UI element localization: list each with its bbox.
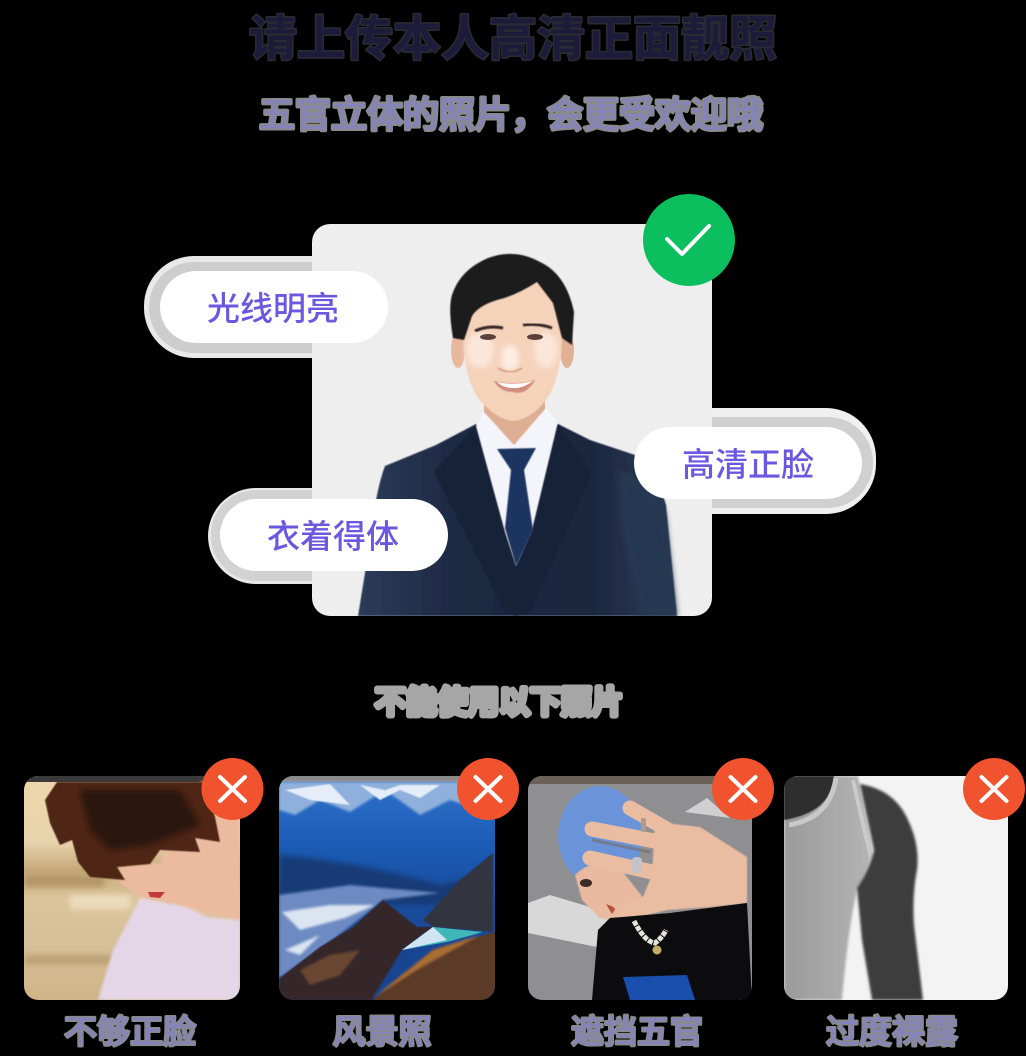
pill backing halos [144, 256, 876, 584]
hand [613, 822, 747, 920]
portrait: man in suit [358, 254, 677, 616]
subtitle: 五官立体的照片，会更受欢迎哦 [259, 94, 763, 135]
label: 不够正脸 [64, 1013, 196, 1050]
thumbnail: not front face [24, 758, 264, 1050]
ears [451, 336, 464, 368]
title: 请上传本人高清正面靓照 [249, 13, 777, 66]
chest [784, 776, 834, 820]
face [574, 866, 643, 920]
face [463, 280, 562, 421]
necklace [634, 921, 666, 943]
neck [484, 400, 546, 445]
pill: decent clothing [220, 499, 448, 571]
thumbnail: blocked face [528, 758, 774, 1050]
pill: clear front face [634, 427, 862, 499]
hair [450, 254, 574, 345]
pill: bright light: 光线明亮 [207, 290, 339, 327]
thumbnail: landscape [279, 758, 519, 1050]
arm [857, 784, 923, 1000]
thumbnail: revealing clothing [784, 758, 1025, 1050]
rings [632, 857, 642, 873]
panel: good example [144, 194, 876, 616]
icon: red cross [712, 758, 774, 820]
pill: bright light [160, 271, 388, 343]
photo card background [312, 224, 712, 616]
label: 遮挡五官 [571, 1013, 703, 1050]
icon: red cross [963, 758, 1025, 820]
beanie [558, 786, 642, 886]
label: 过度裸露 [826, 1013, 958, 1050]
hoodie [592, 903, 752, 1000]
pill: clear front face: 高清正脸 [682, 446, 814, 483]
jacket [358, 424, 677, 616]
brows, eyes, mouth [475, 324, 552, 331]
pill: decent clothing: 衣着得体 [267, 518, 399, 555]
label: 风景照 [332, 1013, 432, 1050]
icon: green check [643, 194, 735, 286]
icon: red cross [457, 758, 519, 820]
section heading: 不能使用以下照片 [375, 685, 623, 720]
shirt [476, 408, 558, 566]
tie [497, 448, 536, 566]
icon: red cross [202, 758, 264, 820]
tank top [784, 776, 872, 1000]
